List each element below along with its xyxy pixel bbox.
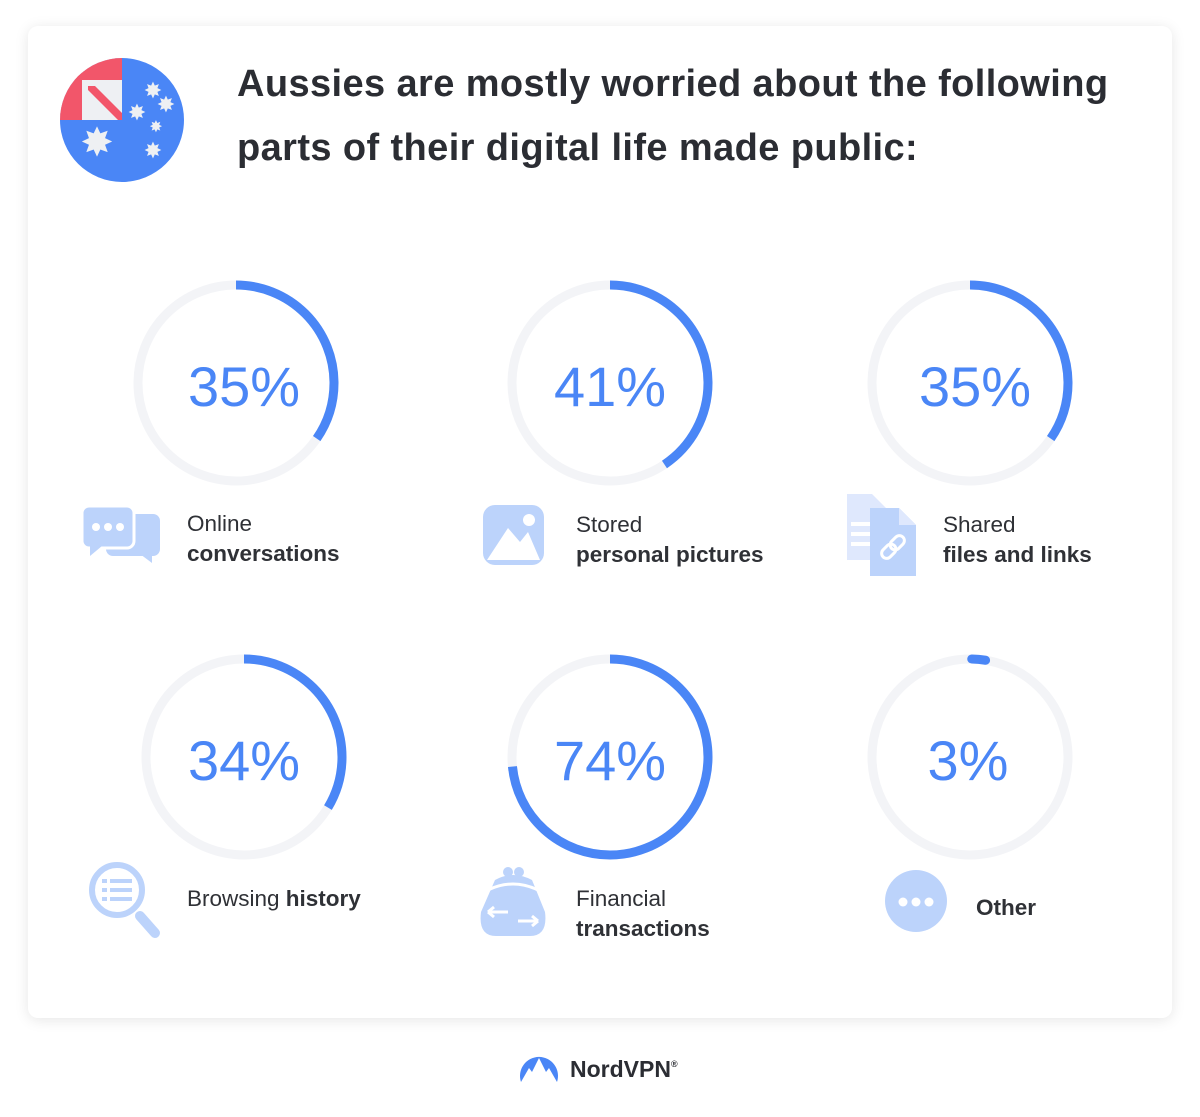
ring: 74% financial: 74% <box>554 729 666 792</box>
label: shared files and links: Shared <box>943 512 1016 537</box>
label: other: Other <box>976 895 1036 920</box>
logo: NordVPN: ® <box>671 1059 678 1069</box>
label: stored personal pictures: Stored <box>576 512 642 537</box>
label: financial transactions: Financial <box>576 886 666 911</box>
icon: australian flag: ✸ <box>157 92 175 117</box>
logo: NordVPN <box>520 1056 678 1082</box>
ring: 35% online conversations: 35% <box>188 355 300 418</box>
icon: chat bubbles <box>82 506 160 563</box>
label: online conversations: conversations <box>187 541 340 566</box>
icon: australian flag: ✸ <box>144 78 162 103</box>
ring: 35% shared files <box>872 285 1068 481</box>
icon: australian flag: ✸ <box>149 119 163 136</box>
icon: other dots <box>885 870 947 932</box>
ring: 3% other: 3% <box>928 729 1008 792</box>
label: browsing history: Browsing history <box>187 886 361 911</box>
ring: 35% online conversations <box>138 285 334 481</box>
label: shared files and links <box>943 512 1092 567</box>
icon: magnifier list <box>92 865 155 933</box>
label: online conversations: Online <box>187 511 252 536</box>
icon: purse <box>481 867 545 936</box>
label: online conversations <box>187 511 340 566</box>
title <box>237 63 1108 169</box>
ring: 34% browsing history <box>146 659 342 855</box>
icon: australian flag: ✸ <box>80 121 114 165</box>
icon: australian flag: ✸ <box>128 100 146 125</box>
icon: picture <box>483 505 544 565</box>
logo: NordVPN: NordVPN <box>570 1056 671 1082</box>
ring: 35% shared files: 35% <box>919 355 1031 418</box>
label: shared files and links: files and links <box>943 542 1092 567</box>
ring: 41% stored pictures <box>512 285 708 481</box>
icon: files and link <box>847 494 916 576</box>
icon: australian flag: ✸ <box>144 138 162 163</box>
ring: 74% financial <box>512 659 708 855</box>
label: stored personal pictures: personal pictures <box>576 542 764 567</box>
title: Aussies are mostly worried about the following <box>237 63 1108 105</box>
ring: 34% browsing history: 34% <box>188 729 300 792</box>
label: financial transactions <box>576 886 710 941</box>
title: parts of their digital life made public: <box>237 127 918 169</box>
label: stored personal pictures <box>576 512 764 567</box>
label: financial transactions: transactions <box>576 916 710 941</box>
ring: 41% stored pictures: 41% <box>554 355 666 418</box>
icon: australian flag <box>60 58 184 182</box>
ring: 3% other <box>870 657 1070 857</box>
